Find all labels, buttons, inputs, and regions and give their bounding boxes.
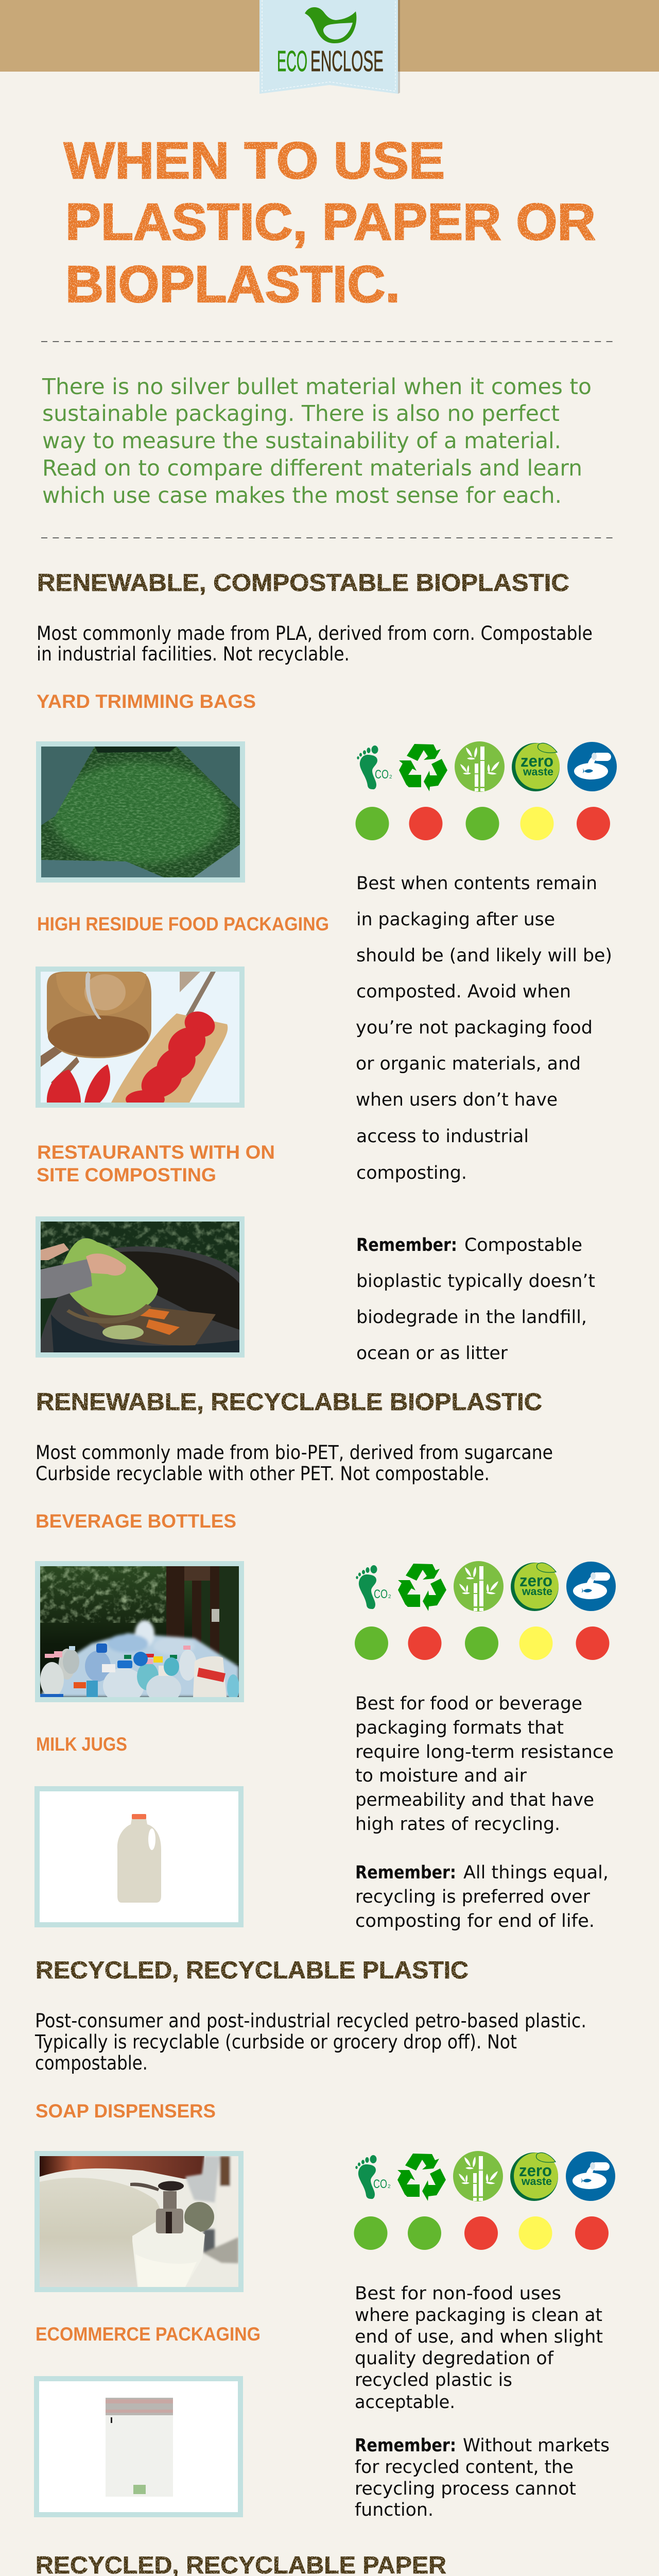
icon row bbox=[357, 741, 617, 792]
body text: where packaging is clean at bbox=[355, 2305, 602, 2326]
section description: Most commonly made from bio-PET, derived from sugarcane bbox=[36, 1442, 553, 1464]
icon: zero waste: waste bbox=[523, 766, 553, 778]
use case label: ECOMMERCE PACKAGING bbox=[36, 2324, 261, 2345]
body text: Best for non-food uses bbox=[355, 2283, 561, 2304]
remember note: Without markets bbox=[463, 2435, 610, 2456]
use case label bbox=[37, 1142, 275, 1185]
remember note: function. bbox=[355, 2500, 433, 2520]
intro text bbox=[42, 374, 592, 509]
remember note bbox=[355, 2435, 610, 2520]
section heading: RENEWABLE, COMPOSTABLE BIOPLASTIC bbox=[37, 569, 569, 596]
icon: biodegradable water bbox=[566, 1562, 616, 1611]
section description: Post-consumer and post-industrial recycled petro-based plastic. bbox=[35, 2010, 586, 2032]
rating dots bbox=[355, 1626, 610, 1660]
icon: carbon footprint bbox=[357, 745, 392, 789]
remember note: composting for end of life. bbox=[355, 1911, 595, 1931]
section heading: RECYCLED, RECYCLABLE PLASTIC bbox=[36, 1956, 469, 1984]
body text: end of use, and when slight bbox=[355, 2327, 603, 2347]
body text: access to industrial bbox=[356, 1126, 529, 1147]
remember note: biodegrade in the landfill, bbox=[356, 1307, 587, 1328]
intro text: Read on to compare different materials and learn bbox=[42, 455, 582, 481]
remember note: Compostable bbox=[464, 1235, 582, 1256]
icon: zero waste: zero bbox=[521, 752, 553, 770]
icon: recycled content bbox=[399, 744, 447, 791]
section description: Typically is recyclable (curbside or grocery drop off). Not bbox=[34, 2031, 517, 2053]
icon: zero waste bbox=[511, 1563, 559, 1611]
body text bbox=[355, 2283, 603, 2413]
body text: require long-term resistance bbox=[355, 1742, 614, 1762]
title: WHEN TO USE bbox=[64, 132, 445, 190]
icon: zero waste: zero bbox=[519, 1571, 552, 1590]
icon: carbon footprint bbox=[356, 1565, 391, 1609]
use case label: MILK JUGS bbox=[36, 1734, 127, 1755]
icon: carbon footprint: 2 bbox=[388, 2184, 391, 2190]
photo: peanut butter and strawberries bbox=[36, 967, 245, 1109]
panel: renewable, recyclable bioplastic bbox=[34, 1388, 616, 1931]
rating dots bbox=[355, 807, 610, 840]
icon: recycled content bbox=[397, 2154, 446, 2201]
photo: poly mailer bbox=[34, 2376, 243, 2517]
remember note: for recycled content, the bbox=[355, 2457, 574, 2478]
body text: composting. bbox=[356, 1163, 467, 1183]
section description: in industrial facilities. Not recyclable. bbox=[37, 643, 350, 665]
use case label: BEVERAGE BOTTLES bbox=[36, 1511, 236, 1532]
icon: zero waste: waste bbox=[521, 2176, 552, 2188]
section description bbox=[34, 2010, 586, 2074]
panel: renewable, compostable bioplastic bbox=[36, 569, 617, 1364]
icon: recycled content bbox=[398, 1564, 446, 1611]
use case label: YARD TRIMMING BAGS bbox=[37, 691, 256, 712]
body text: high rates of recycling. bbox=[355, 1814, 560, 1835]
photo: plastic bottles bbox=[35, 1561, 244, 1704]
remember note: Remember: bbox=[356, 1235, 457, 1256]
body text: Best for food or beverage bbox=[355, 1693, 582, 1714]
title bbox=[64, 132, 596, 313]
body text: quality degredation of bbox=[355, 2348, 554, 2369]
body text: should be (and likely will be) bbox=[356, 945, 612, 966]
photo: grass clippings bbox=[36, 741, 245, 883]
icon: carbon footprint: CO bbox=[375, 768, 389, 782]
icon: zero waste: zero bbox=[519, 2161, 552, 2180]
icon: biodegradable water bbox=[567, 742, 617, 791]
body text: acceptable. bbox=[355, 2392, 455, 2413]
section heading: RENEWABLE, RECYCLABLE BIOPLASTIC bbox=[36, 1388, 542, 1415]
photo: milk jug bbox=[34, 1786, 244, 1927]
photo: soap dispenser bbox=[34, 2151, 244, 2292]
body text: packaging formats that bbox=[355, 1718, 564, 1738]
remember note: ocean or as litter bbox=[356, 1343, 508, 1364]
icon: carbon footprint: CO bbox=[373, 2177, 387, 2191]
icon: carbon footprint: CO bbox=[374, 1587, 388, 1601]
intro text: way to measure the sustainability of a material. bbox=[42, 428, 561, 454]
logo ribbon: ENCLOSE bbox=[310, 45, 384, 78]
icon: biodegradable water bbox=[566, 2151, 615, 2201]
section description bbox=[36, 1442, 553, 1485]
remember note: Remember: bbox=[355, 1862, 456, 1883]
body text: in packaging after use bbox=[356, 909, 555, 930]
body text: you’re not packaging food bbox=[356, 1018, 593, 1038]
remember note: recycling process cannot bbox=[355, 2479, 576, 2499]
icon: renewable bamboo bbox=[455, 741, 505, 792]
section description: compostable. bbox=[35, 2052, 148, 2074]
remember note: All things equal, bbox=[463, 1862, 609, 1883]
remember note: bioplastic typically doesn’t bbox=[356, 1271, 595, 1292]
section description: Curbside recyclable with other PET. Not compostable. bbox=[36, 1463, 490, 1485]
section description bbox=[37, 622, 593, 665]
remember note: Remember: bbox=[355, 2435, 456, 2456]
icon: carbon footprint: 2 bbox=[388, 1594, 391, 1600]
icon: renewable bamboo bbox=[453, 2151, 503, 2201]
use case label: HIGH RESIDUE FOOD PACKAGING bbox=[37, 913, 329, 935]
section description: Most commonly made from PLA, derived from corn. Compostable bbox=[37, 622, 593, 645]
body text: Best when contents remain bbox=[356, 873, 597, 894]
intro text: There is no silver bullet material when it comes to bbox=[42, 374, 592, 400]
icon: zero waste bbox=[512, 743, 560, 791]
remember note bbox=[355, 1862, 609, 1931]
remember note bbox=[356, 1235, 595, 1364]
body text: to moisture and air bbox=[355, 1766, 527, 1786]
body text: permeability and that have bbox=[355, 1790, 594, 1810]
logo ribbon: ECO bbox=[277, 45, 307, 78]
use case label: SOAP DISPENSERS bbox=[36, 2100, 216, 2122]
body text: composted. Avoid when bbox=[356, 981, 571, 1002]
rating dots bbox=[354, 2216, 609, 2250]
icon: zero waste bbox=[510, 2153, 558, 2201]
use case label: SITE COMPOSTING bbox=[37, 1164, 216, 1185]
intro text: sustainable packaging. There is also no perfect bbox=[42, 401, 560, 427]
use case label: RESTAURANTS WITH ON bbox=[37, 1142, 275, 1163]
title: PLASTIC, PAPER OR bbox=[65, 193, 596, 251]
icon row bbox=[356, 1561, 616, 1612]
intro text: which use case makes the most sense for each. bbox=[42, 483, 562, 509]
photo: compost bin bbox=[36, 1216, 245, 1358]
body text: recycled plastic is bbox=[355, 2370, 512, 2391]
remember note: recycling is preferred over bbox=[355, 1887, 591, 1907]
icon: carbon footprint bbox=[355, 2155, 391, 2199]
body text bbox=[356, 873, 612, 1183]
icon row bbox=[355, 2151, 615, 2201]
icon: carbon footprint: 2 bbox=[389, 774, 392, 780]
panel: recycled, recyclable plastic bbox=[34, 1956, 615, 2520]
icon: zero waste: waste bbox=[522, 1586, 552, 1598]
title: BIOPLASTIC. bbox=[65, 256, 400, 313]
body text: when users don’t have bbox=[356, 1090, 558, 1110]
icon: renewable bamboo bbox=[454, 1561, 504, 1612]
header band bbox=[0, 0, 659, 72]
body text bbox=[355, 1693, 614, 1835]
logo ribbon bbox=[259, 0, 400, 94]
body text: or organic materials, and bbox=[356, 1054, 581, 1074]
